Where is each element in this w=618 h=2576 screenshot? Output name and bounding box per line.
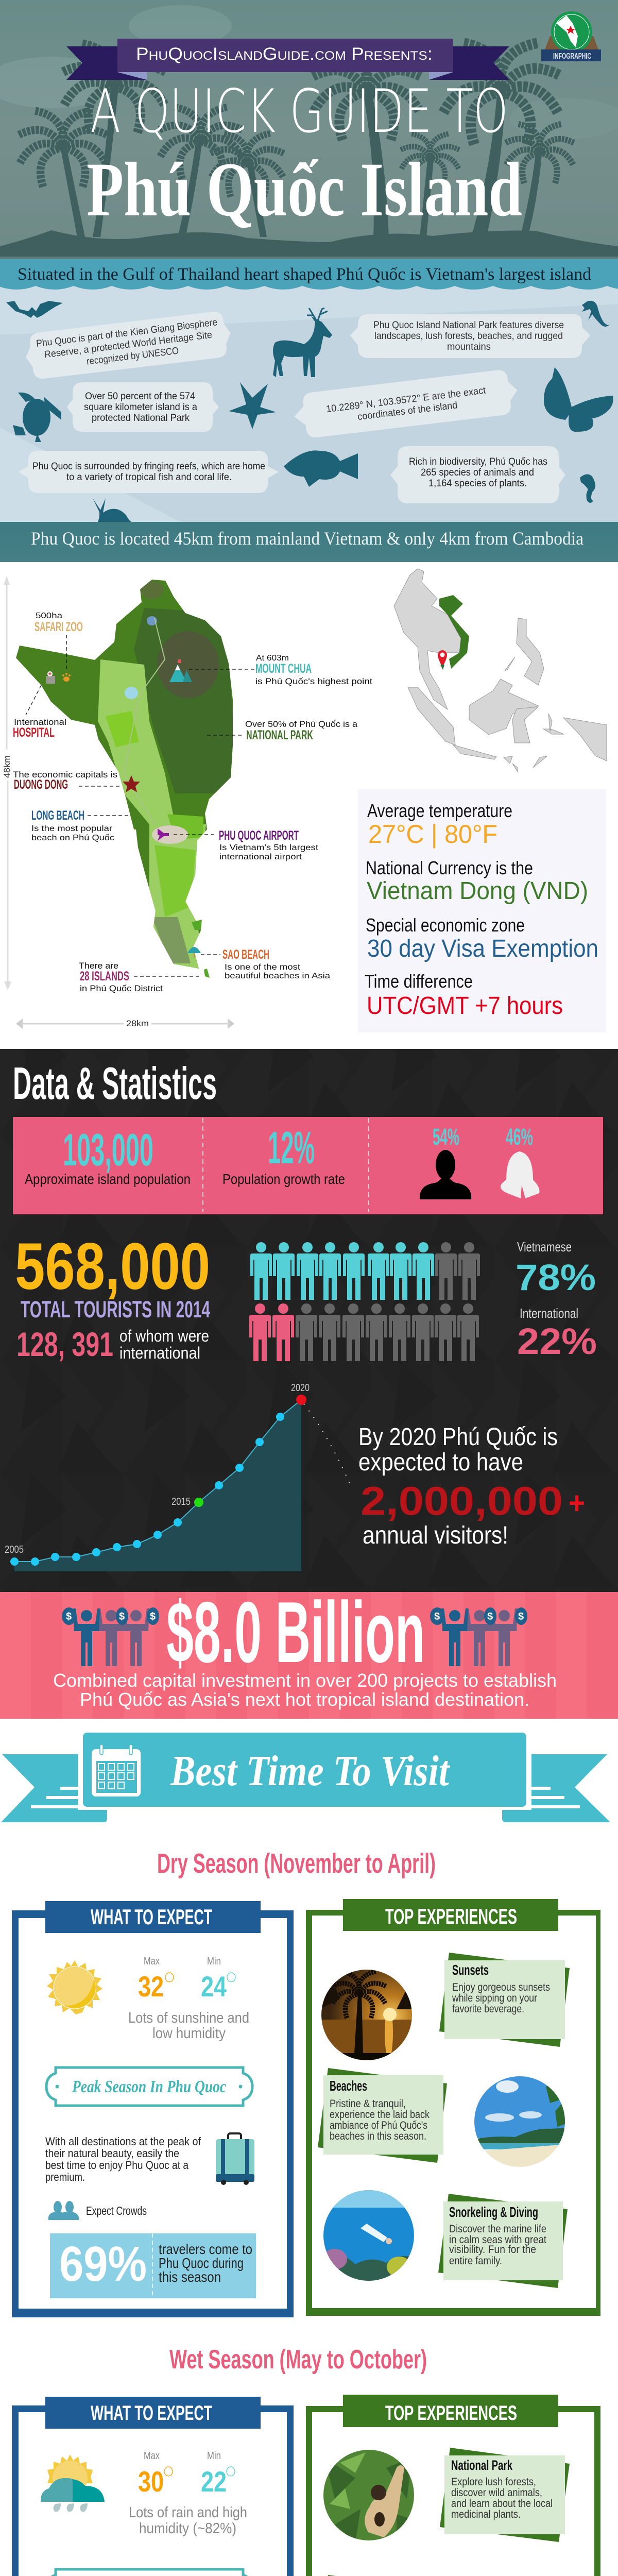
icon: investors right: $	[487, 1611, 493, 1622]
callout: 2020 forecast: expected to have	[358, 1449, 523, 1476]
stat box: 69 percent: travelers come to	[159, 2241, 252, 2257]
card: sunsets: favorite beverage.	[452, 2003, 524, 2015]
bubble: protected park: Over 50 percent of the 574	[85, 391, 195, 402]
data section background	[0, 1049, 618, 1592]
map: star	[123, 775, 140, 792]
icon: deer	[273, 308, 332, 377]
photo: gibbon	[323, 2450, 414, 2540]
label: national park: NATIONAL PARK	[246, 728, 313, 742]
label: long beach	[31, 808, 114, 842]
panel: dry season what to expect: 32	[138, 1970, 164, 2003]
line chart: visitors growth: 2005	[5, 1544, 24, 1555]
panel: quick facts: Special economic zone	[366, 914, 525, 936]
stat box: 69 percent	[50, 2233, 256, 2298]
stat: international share: 22%	[517, 1321, 597, 1362]
stat: total tourists: of whom were	[119, 1327, 209, 1345]
heading: data and statistics: Data & Statistics	[13, 1058, 217, 1109]
bubble: biodiversity	[390, 446, 565, 503]
bubble: biodiversity: 1,164 species of plants.	[428, 478, 527, 489]
panel: wet season top experiences	[306, 2395, 600, 2576]
label: sao beach: beautiful beaches in Asia	[225, 972, 330, 980]
icon: investors left: $	[150, 1611, 156, 1622]
card: national park: medicinal plants.	[451, 2509, 521, 2520]
bubble: protected park	[67, 382, 219, 432]
panel: quick facts: 27°C | 80°F	[368, 820, 497, 849]
card: snorkeling	[438, 2194, 568, 2288]
stat: vietnamese share: 78%	[516, 1258, 596, 1298]
label: sao beach	[222, 947, 330, 980]
panel: wet season what to expect: 30	[138, 2465, 164, 2498]
bubble: protected park: protected National Park	[92, 413, 190, 423]
label: long beach: beach on Phú Quốc	[31, 834, 114, 842]
regional map	[394, 569, 607, 772]
icon: fish	[284, 450, 358, 487]
icon: investors left: $	[66, 1611, 72, 1622]
panel: dry season top experiences	[306, 1899, 600, 2316]
card: snorkeling: in calm seas with great	[449, 2234, 546, 2246]
bubble: coordinates	[291, 368, 520, 439]
panel: wet season what to expect: WHAT TO EXPECT	[91, 2402, 212, 2425]
panel: quick facts: Time difference	[365, 971, 473, 992]
label: safari zoo	[35, 612, 83, 634]
panel: wet season what to expect: Min	[207, 2450, 221, 2462]
heading: dry season: Dry Season (November to April)	[157, 1848, 436, 1879]
stat box: 69 percent: 69%	[59, 2236, 147, 2292]
icon: starfish	[229, 382, 276, 429]
card: beaches: ambiance of Phú Quốc's	[330, 2120, 427, 2131]
icon: chameleon	[582, 301, 611, 327]
label: hospital: HOSPITAL	[13, 725, 55, 740]
panel: dry season what to expect: With all destinations at the peak of	[45, 2135, 201, 2148]
sign: peak season	[46, 2067, 252, 2106]
map: umbrella icon	[187, 947, 201, 957]
label: airport: PHU QUOC AIRPORT	[219, 828, 299, 843]
sign: low season	[46, 2569, 252, 2576]
bubble: national park: Phu Quoc Island National Park features diverse	[373, 320, 564, 331]
panel: quick facts: Vietnam Dong (VND)	[367, 877, 588, 905]
label: national park	[245, 719, 358, 742]
panel: quick facts: National Currency is the	[366, 857, 533, 878]
map: callout lines	[26, 635, 254, 976]
icon: snail	[93, 498, 131, 522]
bubble: biosphere: Reserve, a protected World Heritage Site	[44, 330, 213, 360]
icon: suitcase	[216, 2133, 254, 2185]
banner ribbon: PhuQuocIslandGuide.com Presents:	[136, 44, 433, 64]
stat: total tourists: international	[119, 1344, 200, 1362]
icon: turtle	[13, 393, 61, 442]
heading: wet season: Wet Season (May to October)	[169, 2345, 427, 2375]
card: national park: discover wild animals,	[451, 2487, 542, 2499]
label: airport	[219, 828, 319, 861]
panel: population: 12%	[268, 1122, 315, 1173]
line chart: visitors growth: 2015	[171, 1496, 191, 1507]
panel: quick facts: UTC/GMT +7 hours	[367, 992, 563, 1020]
panel: wet season what to expect: Lots of rain and high	[129, 2504, 247, 2521]
card: waterfalls	[318, 2575, 447, 2576]
intro band	[0, 259, 618, 290]
label: mount chua: At 603m	[256, 654, 289, 663]
panel: population: Approximate island population	[25, 1171, 191, 1187]
panel: quick facts: 30 day Visa Exemption	[367, 935, 598, 962]
bubble: reefs: Phu Quoc is surrounded by fringing reefs, which are home	[32, 461, 265, 472]
panel: wet season what to expect: Max	[144, 2450, 160, 2462]
stat box: 69 percent: Phu Quoc during	[159, 2255, 244, 2271]
bubble: reefs: to a variety of tropical fish and coral life.	[66, 472, 232, 483]
icon: investors left	[62, 1607, 159, 1666]
line chart: visitors growth: 2020	[291, 1382, 310, 1394]
panel: dry season what to expect: 24	[201, 1970, 227, 2003]
label: islands: in Phú Quốc District	[80, 984, 163, 993]
icon: butterfly	[544, 367, 613, 432]
panel: investment	[0, 1584, 618, 1719]
card: snorkeling: Discover the marine life	[449, 2223, 546, 2235]
bubble: coordinates: 10.2289° N, 103.9572° E are the exact	[325, 385, 487, 415]
panel: dry season what to expect: premium.	[45, 2171, 85, 2183]
stat: international share	[517, 1306, 597, 1362]
icon: sun and rain cloud	[41, 2454, 105, 2512]
stat: total tourists: 128, 391	[16, 1325, 113, 1363]
height scale arrow: 48km	[2, 755, 12, 778]
stat: vietnamese share: Vietnamese	[517, 1239, 572, 1255]
icon: investors right: $	[434, 1611, 440, 1622]
bubble: coordinates: coordinates of the island	[357, 400, 458, 422]
label: long beach: Is the most popular	[31, 824, 113, 833]
panel: investment: Phú Quốc as Asia's next hot tropical island destination.	[80, 1689, 529, 1710]
card: sunsets: while sipping on your	[452, 1992, 537, 2004]
banner: best time to visit	[1, 1728, 610, 1822]
stat: vietnamese share	[516, 1239, 596, 1298]
map: hospital icon	[46, 671, 55, 684]
label: airport: international airport	[219, 853, 302, 861]
panel: dry season what to expect: WHAT TO EXPECT	[91, 1905, 212, 1929]
stat: total tourists: 568,000	[15, 1230, 210, 1303]
panel: nature facts	[0, 290, 618, 522]
panel: wet season what to expect: 22	[201, 2465, 227, 2498]
card: beaches: beaches in this season.	[330, 2130, 426, 2142]
card: beaches: Beaches	[330, 2078, 367, 2094]
panel: dry season top experiences: TOP EXPERIENCES	[385, 1904, 517, 1928]
card: sunsets: Sunsets	[452, 1962, 489, 1978]
panel: wet season what to expect: humidity (~82%)	[139, 2520, 236, 2537]
height scale arrow	[2, 576, 12, 990]
photo: snorkeling	[322, 2190, 417, 2282]
card: national park: Explore lush forests,	[451, 2476, 536, 2488]
card: snorkeling: Snorkeling & Diving	[449, 2204, 538, 2220]
panel: wet season what to expect	[12, 2397, 294, 2576]
card: beaches: experience the laid back	[330, 2109, 430, 2121]
label: duong dong: The economic capitals is	[13, 770, 117, 779]
map: location pin	[438, 650, 447, 670]
stat: total tourists	[15, 1230, 210, 1363]
bubble: biodiversity: Rich in biodiversity, Phú Quốc has	[409, 456, 547, 467]
card: sunsets: Enjoy gorgeous sunsets	[452, 1981, 550, 1993]
card: sunsets	[439, 1953, 570, 2047]
pictogram: tourists share	[249, 1242, 480, 1361]
map: mountain icon	[169, 659, 192, 682]
bubble: national park: mountains	[447, 342, 491, 352]
callout: 2020 forecast: +	[569, 1486, 585, 1520]
bubble: biosphere: recognized by UNESCO	[86, 346, 179, 367]
panel: quick facts	[358, 789, 606, 1032]
photo: sunset	[321, 1970, 412, 2060]
callout: 2020 forecast: By 2020 Phú Quốc is	[358, 1423, 558, 1451]
hero background	[0, 0, 618, 259]
panel: population: Population growth rate	[222, 1171, 345, 1187]
width scale arrow: 28km	[126, 1019, 149, 1028]
icon: investors right	[430, 1607, 527, 1666]
card: national park	[440, 2448, 570, 2542]
label: safari zoo: 500ha	[36, 612, 62, 620]
label: national park: Over 50% of Phú Quốc is a	[245, 719, 358, 729]
label: islands	[79, 961, 163, 993]
icon: man	[420, 1150, 471, 1199]
icon: investors left: $	[119, 1611, 125, 1622]
infographic badge	[541, 11, 601, 61]
banner ribbon	[66, 39, 509, 80]
card: national park: National Park	[451, 2458, 513, 2473]
label: mount chua	[255, 654, 372, 686]
map: small islets	[192, 920, 210, 978]
card: national park: and learn about the local	[451, 2498, 553, 2510]
distance band	[0, 522, 618, 562]
label: islands: There are	[79, 961, 118, 971]
label: islands: 28 ISLANDS	[80, 969, 129, 984]
photo: beach	[474, 2076, 566, 2169]
panel: dry season what to expect: best time to enjoy Phu Quoc at a	[45, 2159, 189, 2172]
bubble: protected park: square kilometer island is a	[84, 402, 197, 413]
label: duong dong: DUONG DONG	[14, 777, 68, 792]
callout: 2020 forecast	[358, 1423, 585, 1549]
icon: seahorse	[580, 474, 595, 503]
panel: investment: Combined capital investment in over 200 projects to establish	[53, 1670, 557, 1691]
bubble: national park	[350, 314, 590, 358]
sign: peak season: Peak Season In Phu Quoc	[72, 2077, 226, 2096]
panel: dry season what to expect: Min	[207, 1956, 221, 1967]
icon: calendar	[92, 1744, 141, 1797]
bubble: national park: landscapes, lush forests, beaches, and rugged	[374, 331, 563, 342]
map: paw icon	[62, 673, 71, 682]
icon: investors right: $	[518, 1611, 524, 1622]
label: sao beach: Is one of the most	[225, 963, 301, 972]
stat: international share: International	[520, 1306, 578, 1321]
callout: 2020 forecast: 2,000,000	[360, 1478, 563, 1523]
card: snorkeling: visibility. Fun for the	[449, 2244, 536, 2256]
label: duong dong	[13, 770, 117, 792]
card: snorkeling: entire family.	[449, 2255, 502, 2267]
bubble: biodiversity: 265 species of animals and	[421, 467, 534, 478]
banner: best time to visit: Best Time To Visit	[170, 1747, 450, 1795]
panel: dry season what to expect	[12, 1901, 294, 2317]
line chart: visitors growth	[5, 1382, 350, 1571]
island map	[0, 567, 372, 1029]
panel: population	[13, 1117, 603, 1214]
icon: bat	[6, 301, 63, 318]
bubble: reefs	[19, 451, 279, 493]
label: hospital: International	[14, 717, 66, 727]
intro band: Situated in the Gulf of Thailand heart shaped Phú Quốc is Vietnam's largest island	[18, 265, 591, 284]
label: hospital	[13, 717, 66, 740]
panel: dry season what to expect: Max	[144, 1956, 160, 1967]
stat box: 69 percent: this season	[159, 2269, 221, 2285]
label: safari zoo: SAFARI ZOO	[35, 620, 83, 634]
panel: quick facts: Average temperature	[367, 800, 512, 821]
panel: population: 46%	[506, 1124, 533, 1150]
bubble: biosphere: Phu Quoc is part of the Kien Giang Biosphere	[36, 317, 218, 349]
label: mount chua: is Phú Quốc's highest point	[255, 676, 372, 686]
panel: dry season what to expect: low humidity	[152, 2025, 226, 2042]
stat: total tourists: TOTAL TOURISTS IN 2014	[21, 1296, 210, 1323]
card: beaches	[318, 2068, 447, 2163]
icon: sun	[47, 1960, 102, 2014]
label: mount chua: MOUNT CHUA	[255, 662, 312, 676]
label: airport: Is Vietnam's 5th largest	[219, 843, 319, 852]
icon: woman	[501, 1151, 540, 1198]
panel: wet season top experiences: TOP EXPERIENCES	[385, 2402, 517, 2425]
palm tree silhouettes	[0, 33, 618, 257]
panel: dry season what to expect: Expect Crowds	[86, 2204, 147, 2217]
panel: population: 103,000	[63, 1124, 153, 1175]
panel: dry season what to expect: their natural beauty, easily the	[45, 2147, 179, 2160]
panel: population: 54%	[433, 1124, 459, 1150]
panel: dry season what to expect: Lots of sunshine and	[128, 2010, 249, 2026]
label: sao beach: SAO BEACH	[222, 947, 269, 962]
icon: crowd	[48, 2201, 79, 2220]
map: plane icon	[158, 828, 169, 841]
infographic badge: INFOGRAPHIC	[553, 52, 591, 61]
card: beaches: Pristine & tranquil,	[330, 2098, 406, 2110]
label: long beach: LONG BEACH	[31, 808, 84, 823]
callout: 2020 forecast: annual visitors!	[363, 1522, 508, 1549]
bubble: biosphere	[23, 310, 233, 380]
width scale arrow	[16, 1019, 234, 1029]
panel: investment: $8.0 Billion	[166, 1584, 425, 1681]
distance band: Phu Quoc is located 45km from mainland Vietnam & only 4km from Cambodia	[31, 528, 583, 549]
map: vietnam highlighted	[439, 595, 469, 669]
